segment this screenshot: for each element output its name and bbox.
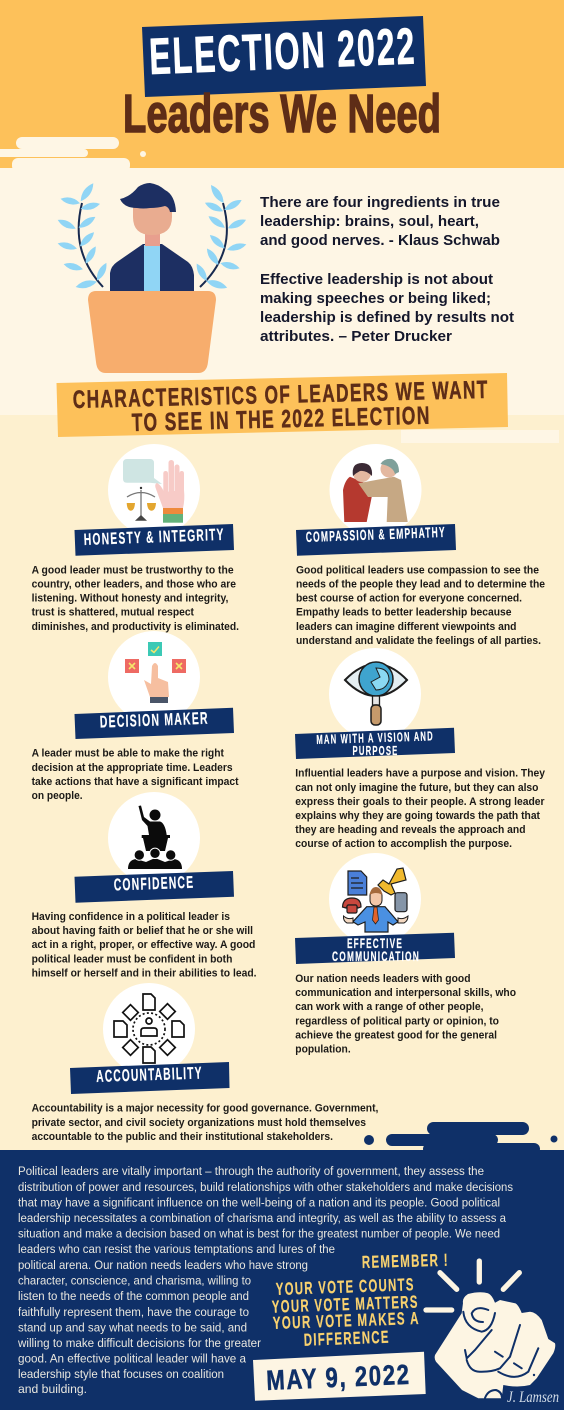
text: man with a vision and purpose: explains why they are going towards the path that <box>295 810 540 822</box>
text: decision maker <box>32 748 239 802</box>
text: man with a vision and purpose: express their goals to their people. A strong leader <box>295 796 545 808</box>
text: honesty and integrity: A good leader must be trustworthy to the <box>32 564 234 576</box>
callout: your vote counts: YOUR VOTE MATTERS <box>271 1292 419 1317</box>
title: Election 2022: ELECTION 2022 <box>148 17 417 85</box>
title: Election 2022 <box>142 16 426 97</box>
text: effective communication: regardless of political party or opinion, to <box>295 1016 499 1028</box>
text: accountability: private sector, and civil society organizations must hold themselves <box>32 1117 366 1129</box>
callout: remember: REMEMBER ! <box>362 1250 449 1272</box>
text: effective communication: Our nation needs leaders with good <box>295 973 470 985</box>
text: closing paragraph: political arena. Our nation needs leaders who have strong <box>18 1258 308 1272</box>
ribbon: effective communication: COMMUNICATION <box>332 948 420 964</box>
text: decision maker: take actions that have a significant impact <box>32 776 239 788</box>
icon: pointing hand with choices <box>108 631 200 723</box>
text: closing paragraph: good. An effective political leader will have a <box>18 1352 246 1366</box>
ribbon: compassion and empathy: COMPASSION & EMPHATHY <box>306 525 446 546</box>
callout: election date: MAY 9, 2022 <box>266 1359 411 1396</box>
text: compassion and empathy: needs of the people they lead and to determine the <box>296 578 545 590</box>
text: confidence: about having faith or belief that he or she will <box>32 925 253 937</box>
panel: confidence <box>32 792 256 980</box>
quote: Peter Drucker: making speeches or being liked; <box>260 290 491 307</box>
icon: person with communication tools <box>329 853 421 945</box>
icon: left laurel <box>56 181 109 290</box>
text: accountability: accountable to the public and their institutional stakeholders. <box>32 1131 333 1143</box>
panel: effective communication <box>295 853 516 1056</box>
header band <box>0 0 564 168</box>
panel: decision maker <box>32 631 239 802</box>
icon: accountability circle <box>103 983 195 1075</box>
text: closing paragraph: that may have a significant influence on the well-being of a nation and its people. Good political <box>18 1196 500 1210</box>
panel: accountability <box>32 983 378 1143</box>
text: compassion and empathy: understand and validate the feelings of all parties. <box>296 635 541 647</box>
text: closing paragraph: leaders who can resist the various temptations and lures of the <box>18 1242 335 1256</box>
text: closing paragraph: character, conscience, and charisma, willing to <box>18 1274 251 1288</box>
illustration: leader at podium <box>56 181 247 373</box>
callout: your vote counts: DIFFERENCE <box>303 1327 390 1350</box>
text: closing paragraph: Political leaders are vitally important – through the authority of government, they assess the <box>18 1164 484 1178</box>
text: effective communication: achieve the greatest good for the general <box>295 1030 497 1042</box>
text: accountability <box>32 1103 378 1143</box>
footer navy clouds <box>364 1122 558 1155</box>
ribbon: accountability: ACCOUNTABILITY <box>96 1063 203 1086</box>
callout: election date <box>253 1352 426 1401</box>
ribbon: confidence: CONFIDENCE <box>113 873 195 894</box>
text: compassion and empathy: best course of action for everyone concerned. <box>296 593 522 605</box>
quote: Peter Drucker: attributes. – Peter Drucker <box>260 328 452 345</box>
heading: characteristics banner: TO SEE IN THE 2022 ELECTION <box>131 402 431 437</box>
text: confidence: act in a right, proper, or effective way. A good <box>32 939 255 951</box>
text: decision maker: on people. <box>32 790 83 802</box>
text: effective communication: population. <box>295 1044 351 1056</box>
ribbon: honesty and integrity <box>74 524 234 556</box>
title: Leaders We Need: Leaders We Need <box>123 84 441 144</box>
icon: speaker at podium <box>108 792 200 884</box>
footer panel <box>0 1150 564 1410</box>
ribbon: decision maker: DECISION MAKER <box>99 709 209 731</box>
text: honesty and integrity <box>32 564 239 633</box>
text: honesty and integrity: listening. Without honesty and integrity, <box>32 593 228 605</box>
icon: person <box>110 183 194 291</box>
text: man with a vision and purpose <box>295 768 545 850</box>
text: decision maker: A leader must be able to make the right <box>32 748 224 760</box>
panel: compassion and empathy <box>296 444 545 647</box>
callout: your vote counts: YOUR VOTE MAKES A <box>272 1308 420 1333</box>
icon: hand and scales <box>108 444 200 536</box>
text: closing paragraph: and building. <box>18 1382 87 1396</box>
text: closing paragraph: listen to the needs of the common people and <box>18 1289 249 1303</box>
ribbon: honesty and integrity: HONESTY & INTEGRITY <box>83 526 225 549</box>
quote: Klaus Schwab <box>260 194 500 249</box>
text: man with a vision and purpose: Influential leaders have a purpose and vision. They <box>295 768 545 780</box>
header clouds <box>0 137 146 172</box>
text: man with a vision and purpose: course of action to accomplish the purpose. <box>295 838 512 850</box>
text: confidence: Having confidence in a political leader is <box>32 911 230 923</box>
quote: Klaus Schwab: leadership: brains, soul, heart, <box>260 213 479 230</box>
heading: characteristics banner <box>56 373 508 437</box>
ribbon: man with a vision and purpose <box>295 728 455 759</box>
text: man with a vision and purpose: they are heading and reveals the approach and <box>295 824 526 836</box>
ribbon: confidence <box>74 871 234 903</box>
panel: honesty and integrity <box>32 444 239 633</box>
ribbon: man with a vision and purpose: MAN WITH A VISION AND <box>316 728 434 747</box>
text: accountability: Accountability is a major necessity for good governance. Government, <box>32 1103 378 1115</box>
text: effective communication: communication and interpersonal skills, who <box>295 987 516 999</box>
text: effective communication <box>295 973 516 1056</box>
text: closing paragraph: situation and make a decision based on what is best for the greatest number of people. We need <box>18 1226 500 1240</box>
text: closing paragraph: faithfully represent them, have the courage to <box>18 1305 249 1319</box>
text: closing paragraph: distribution of power and resources, build relationships with other stakeholders and make decisions <box>18 1180 513 1194</box>
text: closing paragraph: willing to make difficult decisions for the greater <box>17 1336 261 1350</box>
icon: eye and magnifier <box>329 648 421 740</box>
quote: Peter Drucker <box>260 271 514 345</box>
ribbon: man with a vision and purpose: PURPOSE <box>352 743 398 758</box>
text: compassion and empathy <box>296 564 545 647</box>
text: effective communication: can work with a range of other people, <box>295 1001 484 1013</box>
text: honesty and integrity: country, other leaders, and those who are <box>32 578 236 590</box>
text: closing paragraph: leadership style that focuses on coalition <box>18 1367 224 1381</box>
text: compassion and empathy: Good political leaders use compassion to see the <box>296 564 539 576</box>
icon: podium <box>88 291 216 373</box>
ribbon: decision maker <box>74 708 234 739</box>
ribbon: effective communication <box>295 933 455 964</box>
ribbon: effective communication: EFFECTIVE <box>347 935 403 951</box>
icon: right laurel <box>194 183 247 291</box>
ribbon: accountability <box>70 1062 230 1094</box>
text: closing paragraph: leadership necessitates a combination of charisma and integrity, as well as the ability to assess a <box>18 1211 506 1225</box>
text: closing paragraph: stand up and say what needs to be said, and <box>18 1320 247 1334</box>
text: honesty and integrity: diminishes, and productivity is eliminated. <box>32 621 239 633</box>
ribbon: compassion and empathy <box>296 524 456 556</box>
text: closing paragraph <box>17 1164 513 1396</box>
text: honesty and integrity: trust is shattered, mutual respect <box>32 607 194 619</box>
quote: Klaus Schwab: and good nerves. - Klaus Schwab <box>260 232 500 249</box>
text: confidence <box>32 911 256 980</box>
quote: Peter Drucker: Effective leadership is not about <box>260 271 493 288</box>
quote: Klaus Schwab: There are four ingredients in true <box>260 194 500 211</box>
icon: pointing fist <box>426 1261 555 1398</box>
text: compassion and empathy: Empathy leads to better leadership because <box>296 607 512 619</box>
text: confidence: political leader must be confident in both <box>32 954 232 966</box>
text: confidence: himself or herself and in their abilities to lead. <box>32 968 256 980</box>
text: compassion and empathy: leaders can imagine different viewpoints and <box>296 621 516 633</box>
quote: Peter Drucker: leadership is defined by results not <box>260 309 514 326</box>
icon: two people comforting <box>330 444 422 536</box>
callout: your vote counts: YOUR VOTE COUNTS <box>275 1274 415 1299</box>
callout: your vote counts <box>271 1274 420 1350</box>
panel: man with a vision and purpose <box>295 648 545 850</box>
text: decision maker: decision at the appropriate time. Leaders <box>32 762 233 774</box>
text: man with a vision and purpose: can not only imagine the future, but they can also <box>295 782 539 794</box>
